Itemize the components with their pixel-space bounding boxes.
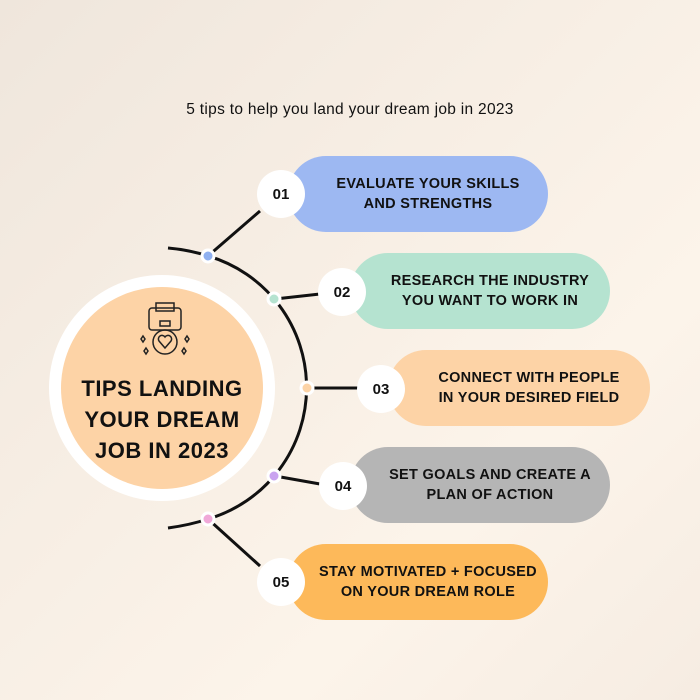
text: SET GOALS AND CREATE A — [389, 467, 591, 483]
text: 05 — [273, 574, 289, 590]
text: ON YOUR DREAM ROLE — [341, 584, 515, 600]
text: AND STRENGTHS — [364, 196, 492, 212]
text: 01 — [273, 186, 289, 202]
text: 03 — [373, 380, 389, 398]
text: 04 — [335, 478, 351, 494]
main circle — [49, 275, 275, 501]
text: CONNECT WITH PEOPLE — [438, 370, 620, 386]
text: IN YOUR DESIRED FIELD — [439, 390, 619, 406]
tip 02 — [318, 253, 610, 329]
icon: briefcase heart — [140, 302, 190, 356]
tip 03 — [357, 350, 650, 426]
text: YOU WANT TO WORK IN — [402, 293, 578, 309]
text: EVALUATE YOUR SKILLS — [336, 176, 520, 192]
subtitle: 5 tips to help you land your dream job in 2023 — [186, 101, 514, 118]
main heading — [81, 376, 243, 463]
tip 04 — [319, 447, 610, 523]
main heading: YOUR DREAM — [84, 407, 240, 432]
tip 05 — [257, 544, 548, 620]
text: PLAN OF ACTION — [427, 487, 553, 503]
main heading: TIPS LANDING — [81, 376, 243, 401]
text: STAY MOTIVATED + FOCUSED — [319, 564, 537, 580]
tip 01 — [257, 156, 548, 232]
text: RESEARCH THE INDUSTRY — [391, 273, 589, 289]
main heading: JOB IN 2023 — [95, 438, 229, 463]
text: 02 — [334, 284, 350, 300]
